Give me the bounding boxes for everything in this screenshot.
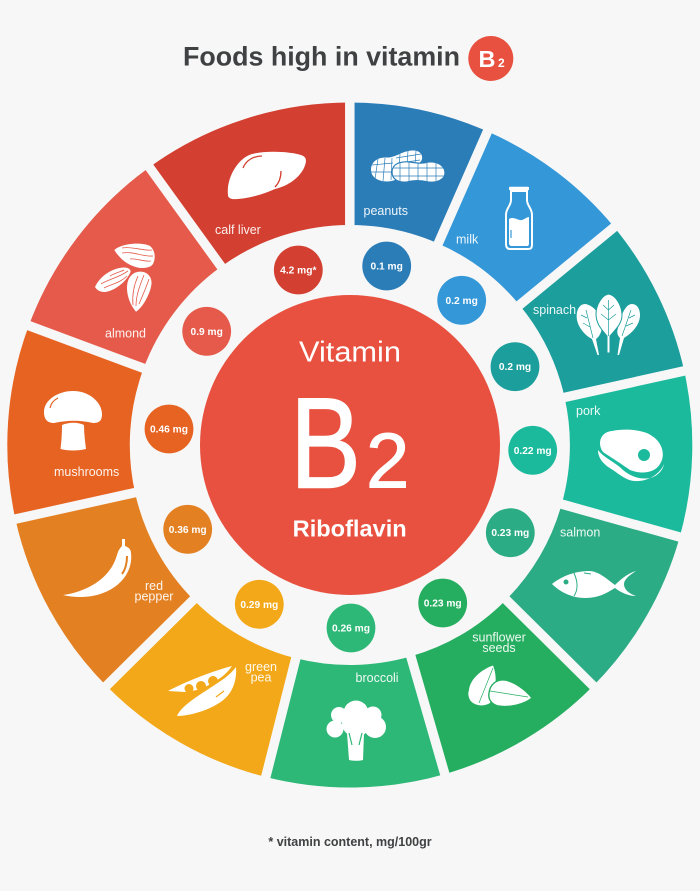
icon: pork steak bbox=[598, 430, 664, 481]
panel: broccoli bbox=[266, 656, 445, 787]
value: peanuts: 0.1 mg bbox=[371, 262, 403, 272]
value: peanuts bbox=[362, 242, 411, 290]
label: calf liver: calf liver bbox=[215, 223, 261, 237]
value: red pepper bbox=[163, 505, 212, 554]
label: red pepper: red bbox=[145, 579, 163, 593]
value: mushrooms bbox=[145, 405, 193, 453]
icon: broccoli bbox=[326, 700, 386, 761]
value: spinach bbox=[491, 342, 539, 391]
panel: calf liver bbox=[149, 102, 350, 267]
panel: sunflower seeds bbox=[411, 600, 593, 774]
value: pork: 0.22 mg bbox=[514, 446, 552, 457]
icon: liver bbox=[228, 152, 306, 199]
panel: milk bbox=[438, 131, 614, 305]
value: sunflower seeds bbox=[418, 579, 467, 627]
value: green pea: 0.29 mg bbox=[240, 600, 278, 611]
label: sunflower seeds: sunflower bbox=[472, 630, 526, 644]
center circle: vitamin B2 riboflavin bbox=[200, 295, 500, 595]
center circle: vitamin B2 riboflavin: 2 bbox=[366, 416, 409, 504]
value: broccoli: 0.26 mg bbox=[332, 624, 370, 634]
segment gaps bbox=[8, 95, 692, 784]
icon: mushroom bbox=[44, 391, 102, 450]
title bbox=[183, 36, 513, 81]
title badge: B2 bbox=[468, 36, 513, 81]
center circle: vitamin B2 riboflavin: Riboflavin bbox=[293, 516, 407, 542]
label: mushrooms: mushrooms bbox=[54, 465, 119, 479]
icon: spinach leaves bbox=[577, 294, 640, 355]
title badge: B2: B bbox=[478, 46, 496, 72]
icon: milk bottle bbox=[506, 187, 532, 249]
icon: almonds bbox=[95, 244, 155, 312]
panel: almond bbox=[29, 167, 221, 368]
label: sunflower seeds: seeds bbox=[482, 641, 516, 655]
value: pork bbox=[508, 426, 557, 475]
value: red pepper: 0.36 mg bbox=[169, 525, 207, 536]
panel: peanuts bbox=[350, 102, 487, 244]
panel: mushrooms bbox=[7, 326, 144, 519]
value: sunflower seeds: 0.23 mg bbox=[424, 598, 462, 610]
panel: salmon bbox=[506, 504, 680, 686]
title: Foods high in vitamin bbox=[183, 42, 460, 72]
label: green pea: pea bbox=[251, 670, 271, 684]
label: peanuts: peanuts bbox=[364, 204, 408, 218]
value: spinach: 0.2 mg bbox=[499, 362, 531, 373]
value: calf liver: 4.2 mg* bbox=[280, 266, 316, 276]
panel: pork bbox=[562, 371, 692, 537]
title badge: B2: 2 bbox=[498, 56, 505, 70]
value: salmon bbox=[486, 508, 535, 557]
panel: spinach bbox=[520, 227, 684, 397]
icon: fish bbox=[552, 571, 636, 598]
label: broccoli: broccoli bbox=[356, 671, 399, 685]
panel: green pea bbox=[106, 600, 296, 777]
label: milk: milk bbox=[456, 232, 479, 246]
value: calf liver bbox=[274, 246, 323, 294]
value: mushrooms: 0.46 mg bbox=[150, 424, 188, 436]
label: almond: almond bbox=[105, 326, 146, 340]
center circle: vitamin B2 riboflavin: Vitamin bbox=[299, 337, 401, 369]
value: milk: 0.2 mg bbox=[446, 296, 478, 307]
icon: chili pepper bbox=[63, 539, 131, 597]
value: broccoli bbox=[327, 604, 375, 652]
label: pork: pork bbox=[576, 404, 601, 418]
label: red pepper: pepper bbox=[135, 590, 173, 604]
icon: peanuts bbox=[371, 150, 445, 182]
center circle: vitamin B2 riboflavin: B bbox=[290, 372, 361, 516]
value: milk bbox=[437, 276, 486, 325]
value: almond: 0.9 mg bbox=[191, 327, 223, 338]
icon: seeds bbox=[468, 666, 532, 707]
value: almond bbox=[182, 307, 231, 356]
label: salmon: salmon bbox=[560, 526, 600, 540]
value: salmon: 0.23 mg bbox=[491, 528, 529, 539]
label: spinach: spinach bbox=[533, 303, 576, 317]
label: green pea: green bbox=[245, 660, 277, 674]
icon: pea pod bbox=[168, 666, 236, 716]
panel: red pepper bbox=[15, 493, 193, 686]
value: green pea bbox=[235, 580, 284, 629]
footnote: * vitamin content, mg/100gr bbox=[268, 835, 432, 849]
